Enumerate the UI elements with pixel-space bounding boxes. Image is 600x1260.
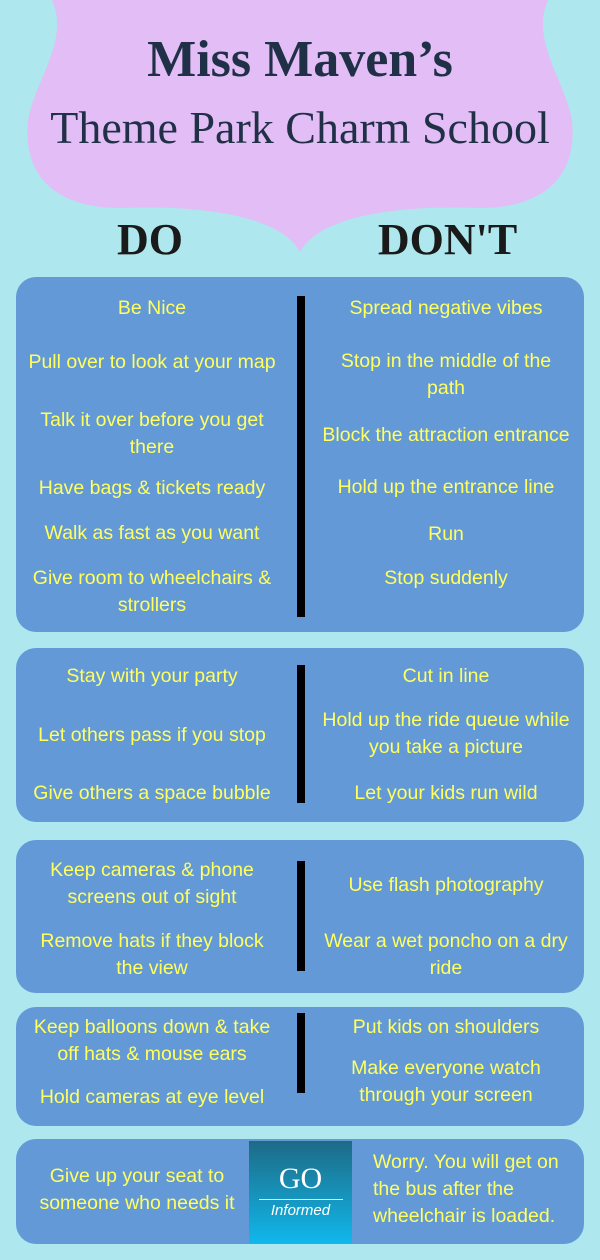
panel 1: Stop suddenly (384, 567, 508, 589)
heading: DON'T: DON'T (378, 215, 517, 264)
panel 3: Remove hats if they block the view (40, 930, 264, 979)
panel 1 (16, 277, 584, 632)
panel 1: Pull over to look at your map (28, 351, 276, 373)
panel 5 (16, 1139, 584, 1244)
panel 3: Wear a wet poncho on a dry ride (324, 930, 568, 979)
panel 4: Put kids on shoulders (353, 1016, 539, 1038)
panel 1: Stop in the middle of the path (341, 350, 551, 399)
panel 5: Give up your seat to someone who needs it (39, 1165, 235, 1214)
panel 1: Block the attraction entrance (322, 424, 570, 446)
title banner (27, 0, 573, 252)
panel 2: Let others pass if you stop (38, 724, 266, 746)
panel 1: Have bags & tickets ready (39, 477, 265, 499)
panel 2: Give others a space bubble (33, 782, 271, 804)
panel 1: Spread negative vibes (350, 297, 542, 319)
panel 1: Run (428, 523, 464, 545)
panel 4: Make everyone watch through your screen (351, 1057, 541, 1106)
panel 3: Keep cameras & phone screens out of sight (50, 859, 254, 908)
logo: GO Informed: GO (279, 1162, 322, 1195)
panel 1: Hold up the entrance line (338, 476, 554, 498)
title banner: Theme Park Charm School (50, 102, 550, 153)
heading: DO: DO (117, 215, 183, 264)
panel 3: Use flash photography (348, 874, 544, 896)
panel 2: Let your kids run wild (354, 782, 538, 804)
panel 4 (16, 1007, 584, 1126)
panel 2: Hold up the ride queue while you take a picture (322, 709, 570, 758)
panel 2: Stay with your party (66, 665, 238, 687)
title banner: Miss Maven’s (147, 31, 453, 88)
panel 1: Walk as fast as you want (45, 522, 259, 544)
panel 1: Talk it over before you get there (40, 409, 264, 458)
panel 1: Be Nice (118, 297, 186, 319)
panel 4: Keep balloons down & take off hats & mouse ears (34, 1016, 270, 1065)
panel 2 (16, 648, 584, 822)
logo: GO Informed (249, 1141, 352, 1244)
panel 3 (16, 840, 584, 993)
panel 1: Give room to wheelchairs & strollers (33, 567, 271, 616)
panel 5: Worry. You will get on the bus after the wheelchair is loaded. (373, 1151, 559, 1227)
panel 4: Hold cameras at eye level (40, 1086, 264, 1108)
logo: GO Informed: Informed (271, 1202, 330, 1219)
panel 2: Cut in line (403, 665, 489, 687)
